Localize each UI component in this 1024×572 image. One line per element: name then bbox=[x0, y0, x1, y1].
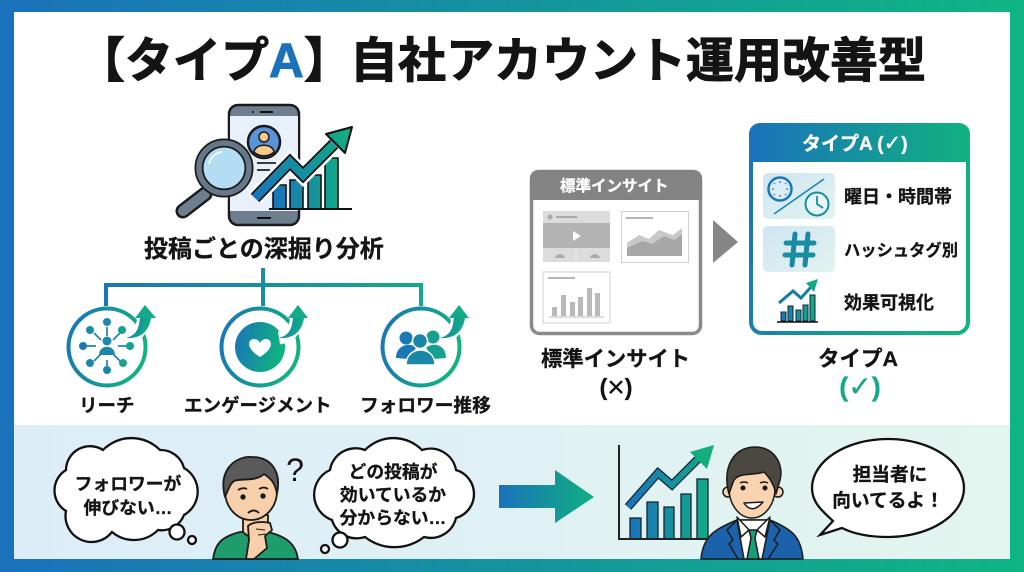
label: engagement: エンゲージメント bbox=[184, 395, 332, 416]
title: 自社アカウント運用改善型 bbox=[350, 35, 926, 88]
icon: phone with magnifier and growth chart bbox=[183, 105, 352, 225]
label: standard insights (cross): ) bbox=[625, 374, 632, 400]
card: area chart bbox=[622, 212, 688, 262]
chart: growth bbox=[619, 445, 714, 539]
speech bubble: suited to staff: 向いてるよ！ bbox=[832, 490, 944, 511]
card: bar chart bbox=[543, 272, 610, 323]
tree connector bbox=[106, 268, 421, 306]
label: hashtag: ハッシュタグ別 bbox=[844, 241, 958, 260]
thought bubble: which post: 効いているか bbox=[340, 485, 446, 505]
arrow: standard to type A bbox=[713, 220, 738, 263]
label: weekday and time: 曜日・時間帯 bbox=[844, 187, 952, 207]
label: follower trend: フォロワー推移 bbox=[360, 395, 491, 416]
speech bubble: suited to staff bbox=[812, 439, 964, 537]
card: video bbox=[543, 211, 610, 262]
person: smiling businessman bbox=[701, 447, 803, 559]
label: standard insights (cross): × bbox=[607, 371, 625, 404]
icon: reach ring bbox=[68, 305, 156, 386]
label: standard insights (cross): 標準インサイト bbox=[541, 347, 690, 371]
label: type A (check): (✓) bbox=[839, 370, 881, 403]
thought bubble: which post: 分からない… bbox=[340, 508, 446, 528]
icon: engagement ring bbox=[222, 305, 308, 386]
panel: type A bbox=[749, 123, 970, 333]
panel: standard insights bbox=[530, 170, 702, 334]
icon: question mark: ? bbox=[286, 452, 304, 488]
arrow: before to after bbox=[499, 470, 594, 523]
row: hashtag bbox=[763, 226, 958, 272]
metric: engagement bbox=[184, 305, 332, 416]
person: worried bbox=[213, 457, 298, 559]
metric: follower trend bbox=[360, 305, 491, 416]
row: visualised effect bbox=[777, 279, 934, 322]
thought bubble: followers: フォロワーが bbox=[75, 473, 182, 494]
row: weekday and time bbox=[763, 173, 952, 219]
band: before and after bbox=[14, 425, 1010, 559]
panel header: type A: タイプA (✓) bbox=[802, 131, 908, 155]
speech bubble: suited to staff: 担当者に bbox=[853, 464, 927, 485]
metric: reach bbox=[68, 305, 156, 416]
label: reach: リーチ bbox=[79, 395, 135, 416]
thought bubble: followers: 伸びない… bbox=[84, 498, 172, 518]
label: standard insights (cross): ( bbox=[600, 374, 607, 400]
label: type A (check): タイプA bbox=[818, 347, 898, 371]
title: 【タイプA】 bbox=[77, 35, 352, 88]
label: standard insights (cross) bbox=[541, 347, 690, 404]
thought bubble: followers bbox=[54, 438, 198, 544]
label: type A (check) bbox=[818, 347, 898, 403]
panel header: standard insights: 標準インサイト bbox=[560, 176, 669, 195]
thought bubble: which post bbox=[314, 438, 474, 553]
thought bubble: which post: どの投稿が bbox=[349, 461, 438, 482]
heading: deep-dive analysis: 投稿ごとの深掘り分析 bbox=[144, 235, 384, 263]
icon: follower ring bbox=[382, 305, 469, 386]
label: visualised effect: 効果可視化 bbox=[844, 293, 934, 313]
